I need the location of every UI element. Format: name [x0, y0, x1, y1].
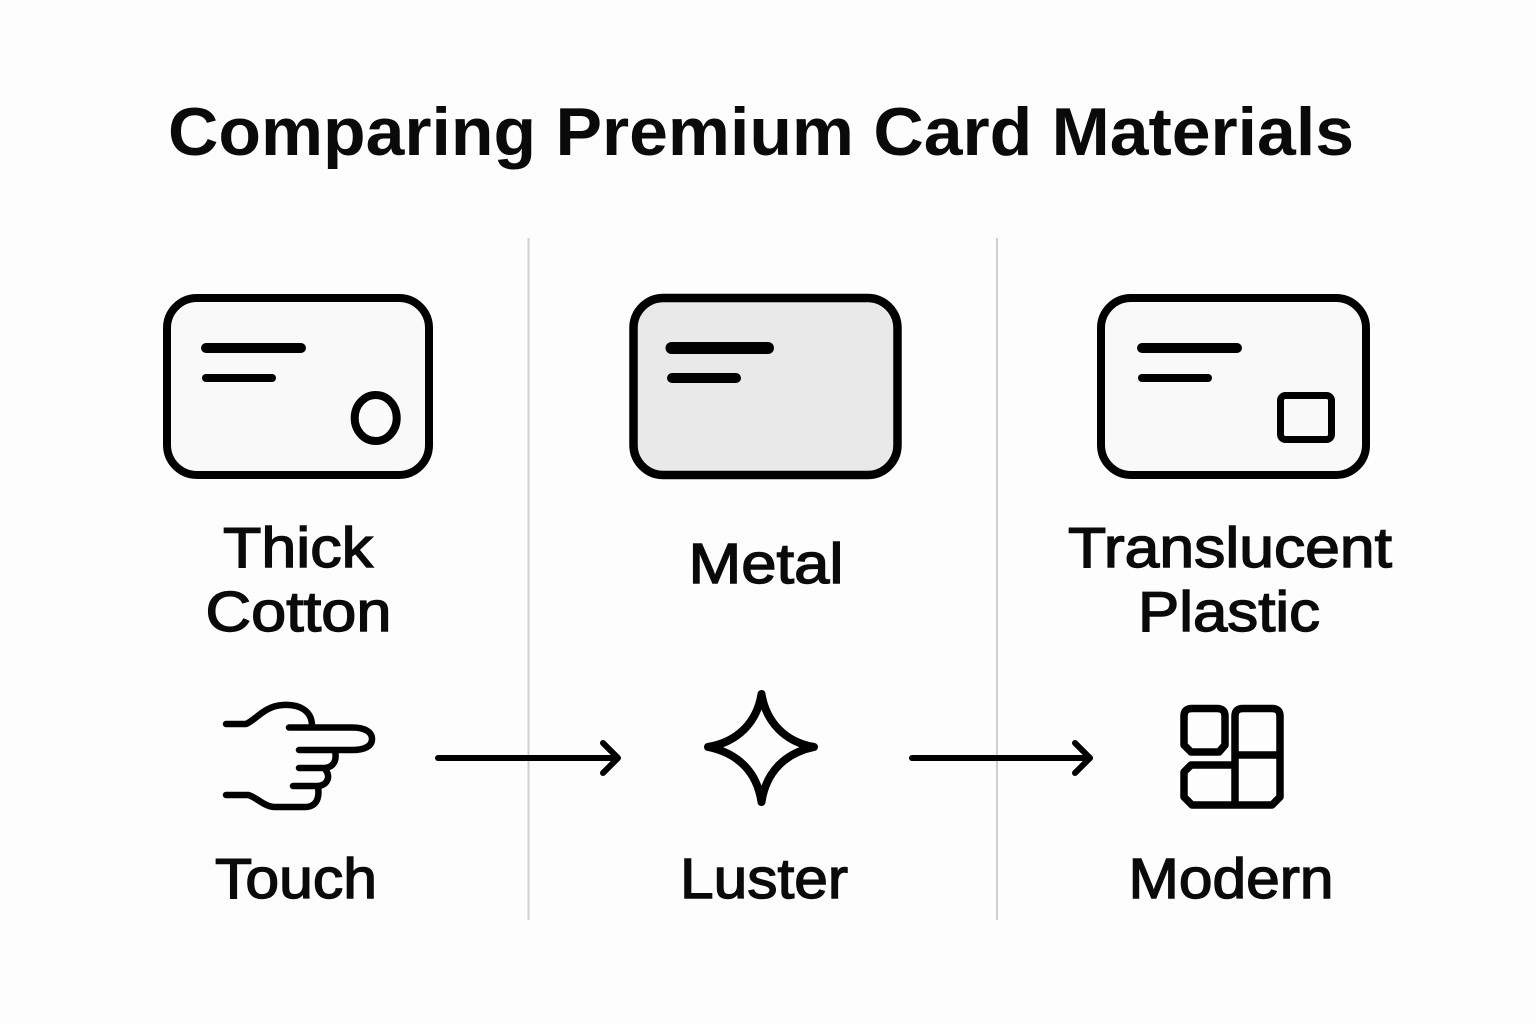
- icon: luster sparkle: [708, 694, 814, 802]
- label: luster: Luster: [680, 847, 848, 911]
- panel: thick cotton: [167, 298, 429, 911]
- label: touch: Touch: [215, 847, 377, 911]
- arrow: luster to modern: [912, 743, 1090, 773]
- arrow: touch to luster: [438, 743, 618, 773]
- icon: modern grid: [1184, 708, 1280, 805]
- label: translucent plastic: Translucent: [1068, 516, 1392, 580]
- label: metal: Metal: [688, 532, 844, 596]
- icon: plastic card: [1101, 298, 1366, 475]
- label: translucent plastic: [1068, 516, 1392, 644]
- title: Comparing Premium Card Materials: [168, 94, 1354, 170]
- label: translucent plastic: Plastic: [1138, 580, 1320, 644]
- icon: pointing hand: [226, 705, 372, 807]
- panel: metal: [634, 298, 898, 911]
- label: modern: Modern: [1128, 847, 1334, 911]
- icon: metal card: [634, 298, 898, 475]
- label: thick cotton: [206, 516, 392, 644]
- icon: cotton card: [167, 298, 429, 475]
- label: thick cotton: Thick: [223, 516, 374, 580]
- label: thick cotton: Cotton: [206, 580, 392, 644]
- panel: translucent plastic: [1068, 298, 1392, 911]
